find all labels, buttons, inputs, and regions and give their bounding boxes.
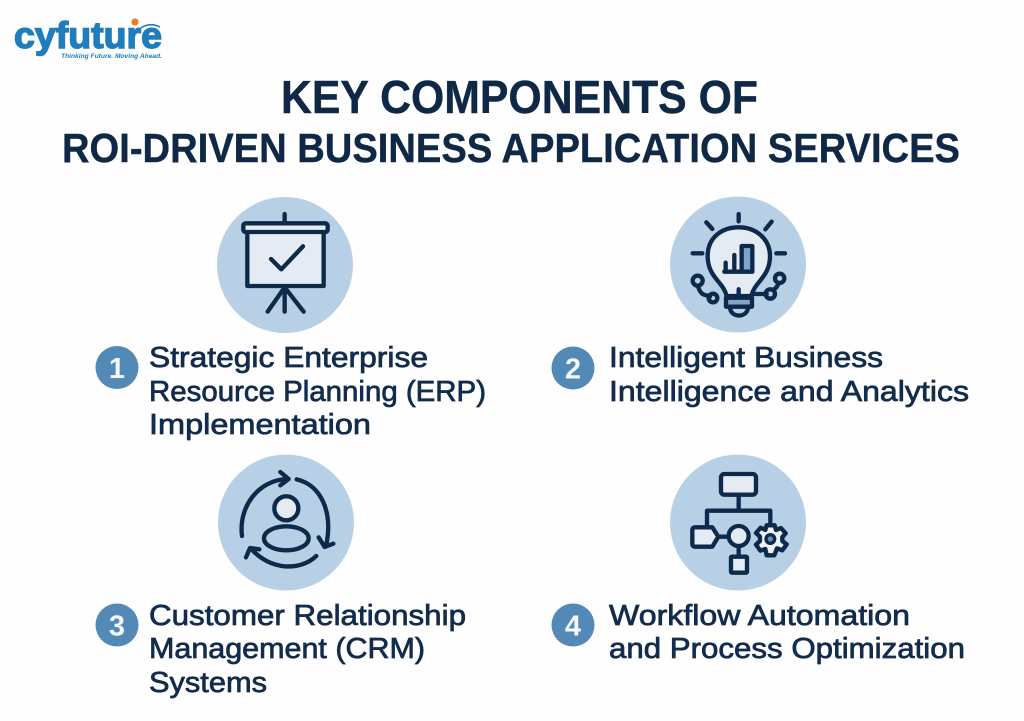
badge 3: 3 — [109, 610, 125, 642]
badge 2: 2 — [565, 354, 581, 386]
badge 3 — [96, 604, 138, 646]
title: ROI-DRIVEN BUSINESS APPLICATION SERVICES — [62, 125, 960, 171]
badge 4: 4 — [565, 610, 581, 642]
label 1: Resource Planning (ERP) — [149, 376, 486, 408]
badge 2 — [552, 346, 594, 390]
badge 1: 1 — [109, 353, 125, 385]
badge 4 — [552, 604, 594, 646]
logo: cyfuture: Thinking Future. Moving Ahead. — [61, 53, 162, 60]
label 3: Customer Relationship — [149, 600, 466, 632]
label 4 — [609, 600, 965, 665]
logo: cyfuture: cyfuture — [14, 15, 162, 56]
title — [62, 71, 960, 171]
icon: light bulb with bar chart — [670, 196, 806, 332]
icon: presentation board with check mark — [217, 197, 353, 333]
item 4: workflow automation — [552, 600, 965, 665]
title: KEY COMPONENTS OF — [281, 71, 758, 123]
label 2: Intelligence and Analytics — [609, 376, 969, 408]
item 1: strategic ERP implementation — [96, 342, 486, 441]
icon: customer surrounded by cycle arrows — [218, 454, 354, 590]
icon: workflow diagram with gear — [670, 454, 806, 590]
item 2: intelligent BI and analytics — [552, 342, 969, 408]
item 3: CRM systems — [96, 600, 466, 699]
label 1: Implementation — [149, 409, 371, 441]
badge 1 — [96, 346, 138, 389]
label 3 — [149, 600, 466, 699]
label 1 — [149, 342, 486, 441]
label 3: Management (CRM) — [149, 633, 425, 665]
label 2: Intelligent Business — [609, 342, 883, 374]
label 4: and Process Optimization — [609, 633, 965, 665]
label 4: Workflow Automation — [609, 600, 910, 632]
label 2 — [609, 342, 969, 408]
label 3: Systems — [149, 667, 267, 699]
label 1: Strategic Enterprise — [149, 342, 428, 374]
